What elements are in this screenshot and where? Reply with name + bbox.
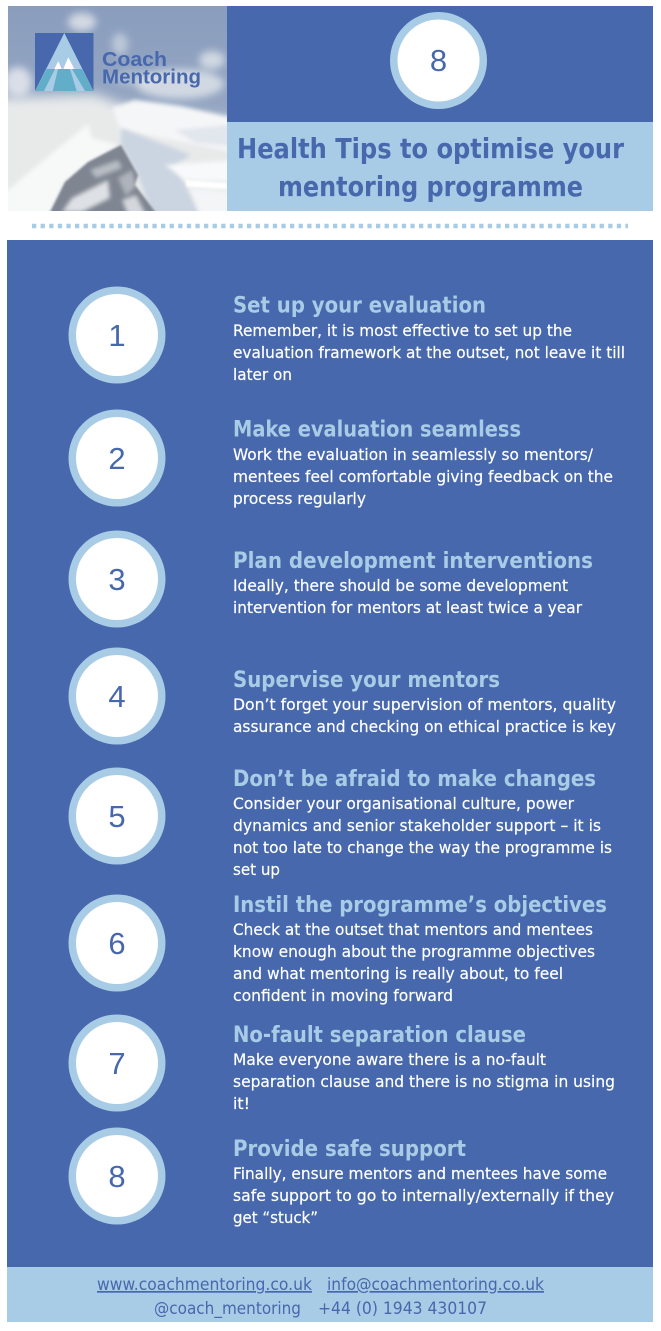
tip 4 text bbox=[233, 667, 616, 736]
tip 4 text: assurance and checking on ethical practice is key bbox=[233, 717, 616, 736]
tip 5 badge: 5 bbox=[108, 799, 126, 834]
tip 4 badge bbox=[68, 648, 166, 744]
tip 1 text: Remember, it is most effective to set up the bbox=[233, 321, 572, 340]
dotted divider bbox=[32, 224, 628, 228]
tip 4 bbox=[68, 648, 616, 744]
tip 8 badge bbox=[68, 1128, 166, 1224]
tip 1 text bbox=[233, 292, 625, 384]
logo: Coach Mentoring: Mentoring bbox=[102, 66, 201, 88]
footer contact bar bbox=[7, 1267, 653, 1322]
tip 3 text bbox=[233, 548, 593, 617]
header number badge bbox=[390, 12, 487, 109]
tip 6 text bbox=[233, 892, 607, 1005]
title banner: mentoring programme bbox=[278, 170, 583, 203]
tip 7 badge: 7 bbox=[108, 1046, 126, 1081]
tip 6 text: and what mentoring is really about, to feel bbox=[233, 964, 563, 983]
tip 6 text: Check at the outset that mentors and mentees bbox=[233, 920, 593, 939]
tip 2 badge: 2 bbox=[108, 441, 126, 476]
tip 5 text bbox=[233, 766, 612, 879]
tip 3 text: Plan development interventions bbox=[233, 548, 593, 574]
tip 7 text bbox=[233, 1022, 615, 1113]
tip 6 bbox=[68, 892, 607, 1005]
tip 6 badge bbox=[68, 894, 166, 992]
tip 4 text: Don’t forget your supervision of mentors, quality bbox=[233, 695, 616, 714]
tip 2 bbox=[68, 410, 613, 508]
tip 4 text: Supervise your mentors bbox=[233, 667, 500, 693]
tip 2 badge bbox=[68, 410, 166, 506]
tip 7 bbox=[68, 1014, 615, 1113]
tip 1 badge: 1 bbox=[108, 318, 126, 353]
tip 2 text: process regularly bbox=[233, 489, 366, 508]
title banner bbox=[227, 122, 653, 211]
logo: Coach Mentoring bbox=[35, 33, 201, 91]
tip 7 text: it! bbox=[233, 1094, 250, 1113]
main panel background bbox=[7, 240, 653, 1267]
tip 5 text: Consider your organisational culture, power bbox=[233, 794, 574, 813]
tip 2 text: Make evaluation seamless bbox=[233, 416, 521, 442]
tip 2 text: mentees feel comfortable giving feedback on the bbox=[233, 467, 613, 486]
footer contact bar: @coach_mentoring bbox=[154, 1299, 301, 1319]
tip 8 text: Provide safe support bbox=[233, 1136, 466, 1162]
footer contact bar: www.coachmentoring.co.uk bbox=[97, 1275, 312, 1295]
tip 8 bbox=[68, 1128, 614, 1227]
tip 1 badge bbox=[68, 286, 166, 384]
tip 8 text bbox=[233, 1136, 614, 1227]
tip 5 badge bbox=[68, 768, 166, 864]
tip 7 text: No-fault separation clause bbox=[233, 1022, 526, 1048]
tip 5 bbox=[68, 766, 612, 879]
tip 8 text: get “stuck” bbox=[233, 1208, 318, 1227]
tip 8 text: safe support to go to internally/externally if they bbox=[233, 1186, 614, 1205]
tip 4 badge: 4 bbox=[108, 679, 126, 714]
tip 6 text: know enough about the programme objectives bbox=[233, 942, 595, 961]
tip 6 badge: 6 bbox=[108, 926, 126, 961]
tip 5 text: set up bbox=[233, 860, 280, 879]
logo: Coach Mentoring: Coach bbox=[102, 48, 167, 71]
tip 3 badge bbox=[68, 530, 166, 628]
header photo: snowy mountain bbox=[8, 6, 227, 211]
tip 1 text: later on bbox=[233, 365, 292, 384]
tip 7 badge bbox=[68, 1014, 166, 1112]
tip 7 text: separation clause and there is no stigma in using bbox=[233, 1072, 615, 1091]
tip 8 text: Finally, ensure mentors and mentees have some bbox=[233, 1164, 607, 1183]
tip 3 text: Ideally, there should be some development bbox=[233, 576, 568, 595]
tip 1 text: Set up your evaluation bbox=[233, 292, 486, 318]
tip 8 badge: 8 bbox=[108, 1159, 126, 1194]
tip 1 bbox=[68, 286, 625, 384]
tip 6 text: Instil the programme’s objectives bbox=[233, 892, 607, 918]
tip 5 text: not too late to change the way the programme is bbox=[233, 838, 612, 857]
tip 5 text: dynamics and senior stakeholder support – it is bbox=[233, 816, 601, 835]
tip 3 badge: 3 bbox=[108, 562, 126, 597]
footer contact bar: info@coachmentoring.co.uk bbox=[327, 1275, 544, 1295]
tip 6 text: confident in moving forward bbox=[233, 986, 453, 1005]
tip 3 text: intervention for mentors at least twice a year bbox=[233, 598, 582, 617]
tip 7 text: Make everyone aware there is a no-fault bbox=[233, 1050, 546, 1069]
tip 2 text bbox=[233, 416, 613, 508]
tip 2 text: Work the evaluation in seamlessly so mentors/ bbox=[233, 445, 594, 464]
tip 1 text: evaluation framework at the outset, not leave it till bbox=[233, 343, 625, 362]
footer contact bar: +44 (0) 1943 430107 bbox=[318, 1299, 487, 1319]
tip 3 bbox=[68, 530, 593, 628]
tip 5 text: Don’t be afraid to make changes bbox=[233, 766, 596, 792]
header number badge: 8 bbox=[430, 43, 447, 78]
header blue band bbox=[227, 6, 653, 122]
